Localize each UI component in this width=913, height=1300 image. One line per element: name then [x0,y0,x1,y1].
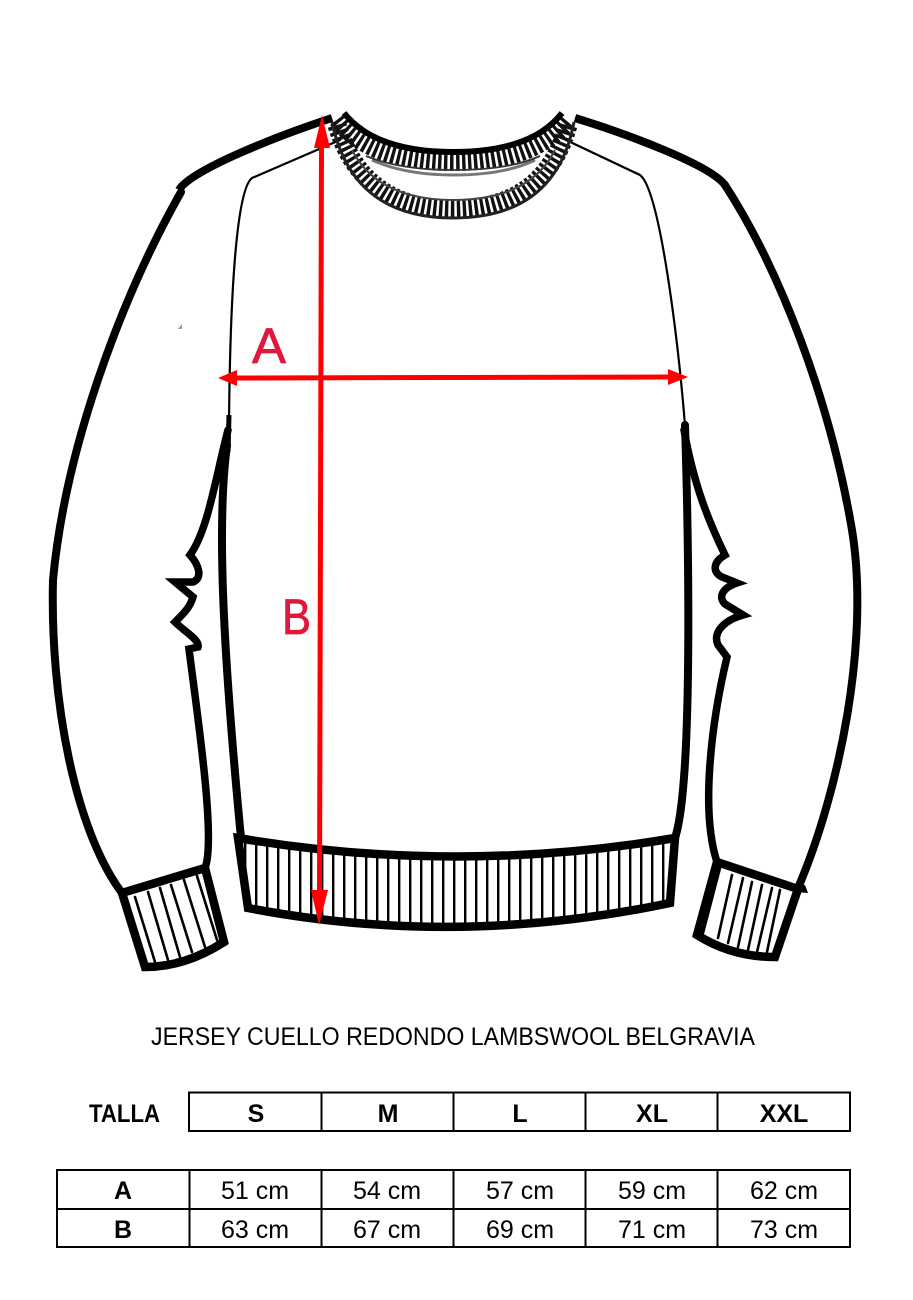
label B: B [282,589,311,645]
row A: 51 cm [221,1177,289,1205]
talla label: TALLA [89,1100,160,1128]
right cuff [697,862,798,957]
small grey speck [178,324,182,329]
label A: A [252,318,287,374]
measurements table [57,1170,850,1247]
row B: B [114,1216,132,1244]
row B: 63 cm [221,1216,289,1244]
row A: A [114,1177,132,1205]
body thin outline [229,140,685,425]
size guide infographic [48,111,862,1248]
size labels: S [248,1100,264,1128]
measurement arrow A [218,369,688,386]
left cuff [122,868,224,967]
measurement arrow B [311,115,330,925]
size labels: M [378,1100,398,1128]
right sleeve [575,118,857,893]
left sleeve [53,118,332,893]
size labels: XXL [760,1100,808,1128]
row B [114,1216,818,1244]
size labels: XL [636,1100,668,1128]
row A: 57 cm [486,1177,554,1205]
size labels [248,1100,808,1128]
body side seams [222,415,688,838]
size header grid [189,1092,850,1131]
table grid [57,1170,850,1247]
row B: 67 cm [353,1216,421,1244]
row A: 59 cm [618,1177,686,1205]
size header row [89,1092,850,1131]
row A: 54 cm [353,1177,421,1205]
bottom hem [238,830,680,940]
row B: 71 cm [618,1216,686,1244]
row A: 62 cm [750,1177,818,1205]
row A [114,1177,818,1205]
product title: JERSEY CUELLO REDONDO LAMBSWOOL BELGRAVIA [151,1023,755,1051]
sweater drawing [53,113,857,967]
size labels: L [512,1100,528,1128]
row B: 73 cm [750,1216,818,1244]
ribbed collar [332,113,574,218]
row B: 69 cm [486,1216,554,1244]
